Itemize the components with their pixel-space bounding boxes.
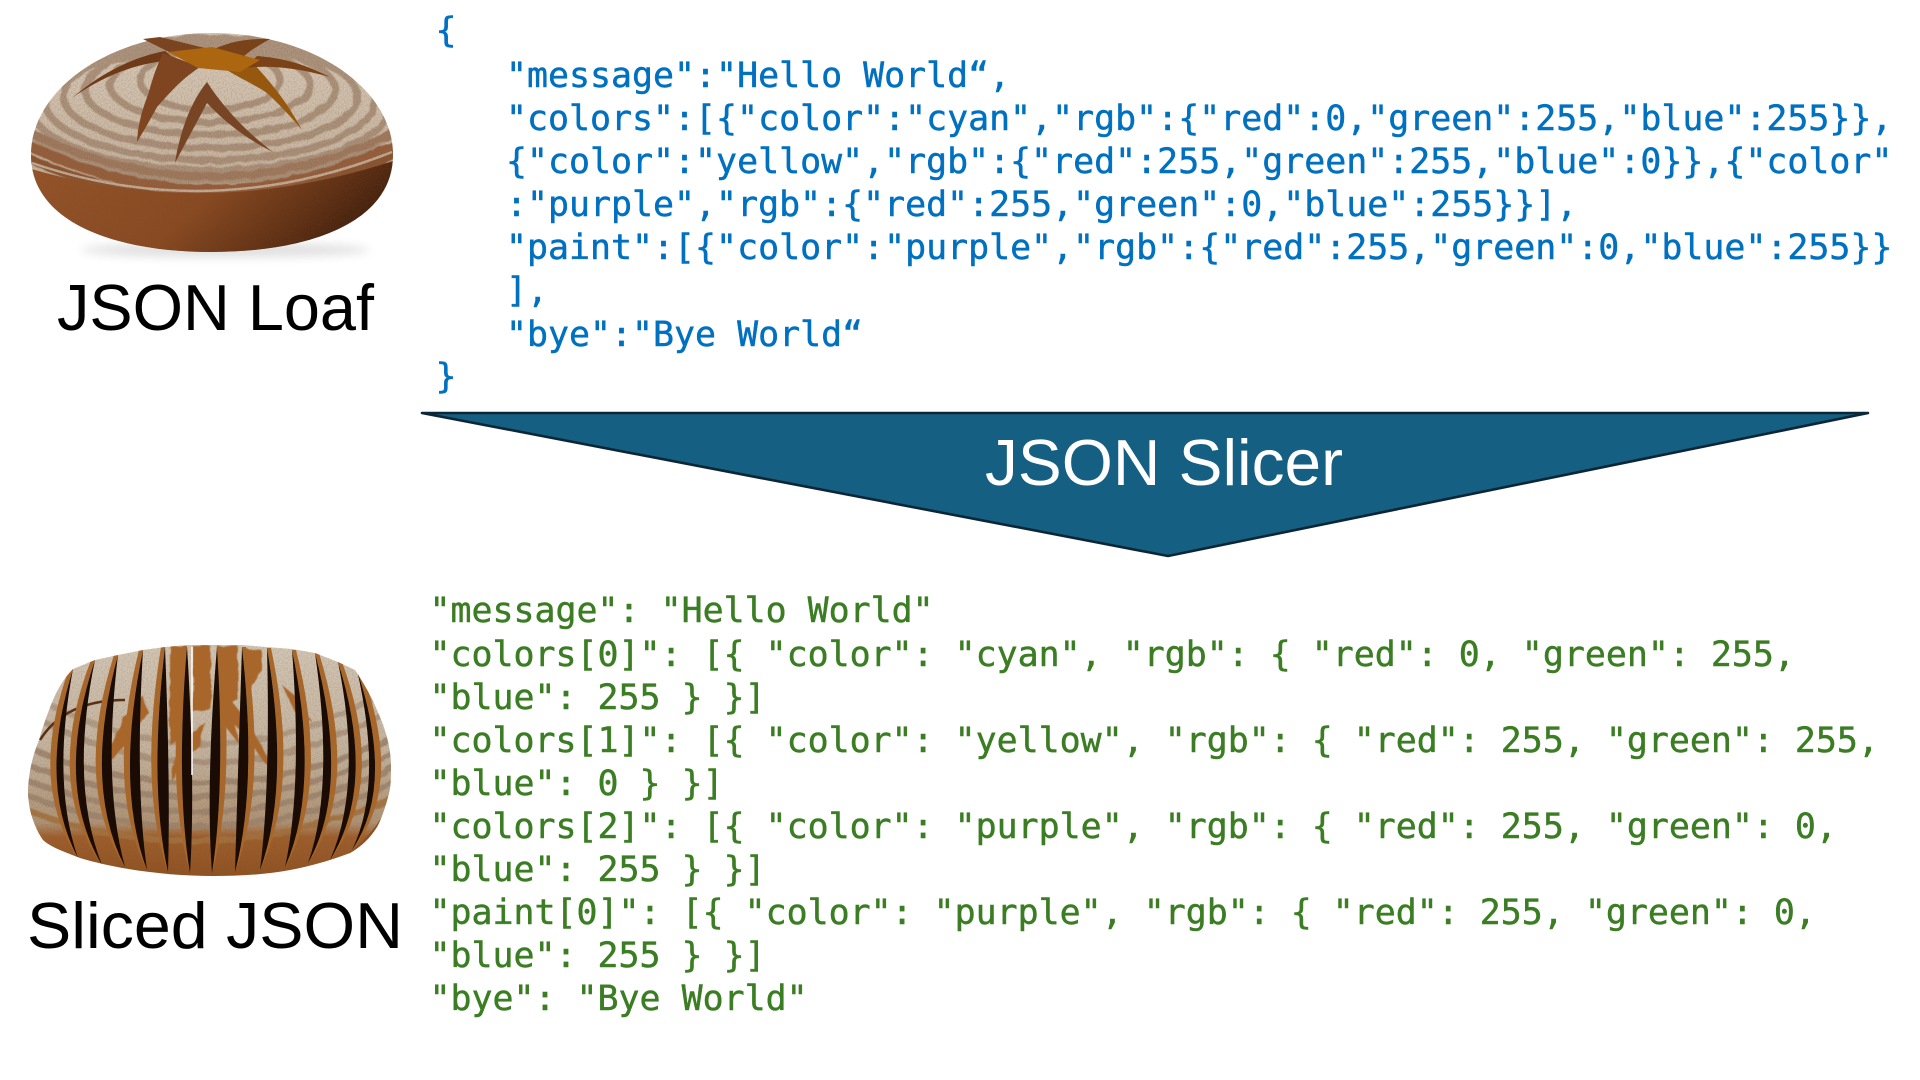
- code block: input JSON: :"purple","rgb":{"red":255,"green":0,"blue":255}}],: [506, 185, 1577, 225]
- code block: sliced output JSON: "bye": "Bye World": [430, 979, 808, 1019]
- code block: input JSON: "message":"Hello World“,: [506, 56, 1010, 96]
- icon: brown central slice tops: [100, 646, 312, 780]
- code block: input JSON: "bye":"Bye World“: [506, 315, 863, 355]
- code block: input JSON: "paint":[{"color":"purple","rgb":{"red":255,"green":0,"blue":255}}: [506, 228, 1892, 268]
- label: JSON Slicer: JSON Slicer: [985, 426, 1343, 499]
- icon: surface cut marks: [40, 700, 125, 740]
- arrow: JSON Slicer funnel: [422, 413, 1868, 556]
- code block: sliced output JSON: "blue": 0 } }]: [430, 764, 724, 804]
- code block: sliced output JSON: "message": "Hello World": [430, 591, 934, 631]
- code block: input JSON: {"color":"yellow","rgb":{"red":255,"green":255,"blue":0}},{"color": [506, 142, 1892, 182]
- code block: sliced output JSON: "blue": 255 } }]: [430, 936, 766, 976]
- code block: sliced output JSON: "paint[0]": [{ "color": "purple", "rgb": { "red": 255, "green": 0,: [430, 893, 1816, 933]
- code block: input JSON: ],: [506, 271, 548, 311]
- icon: bread scoring cuts: [72, 37, 330, 163]
- code block: sliced output JSON: [430, 591, 1879, 1019]
- icon: sliced bread loaf: [20, 640, 400, 880]
- code block: input JSON: "colors":[{"color":"cyan","rgb":{"red":0,"green":255,"blue":255}},: [506, 99, 1892, 139]
- label: Sliced JSON: Sliced JSON: [27, 889, 403, 962]
- icon: gaps between slices: [56, 646, 375, 873]
- code block: sliced output JSON: "blue": 255 } }]: [430, 850, 766, 890]
- icon: whole bread loaf: [18, 28, 404, 262]
- label: JSON Loaf: JSON Loaf: [57, 271, 375, 344]
- code block: sliced output JSON: "blue": 255 } }]: [430, 678, 766, 718]
- code block: input JSON: {: [436, 11, 457, 51]
- icon: slice faces: [50, 646, 381, 873]
- code block: sliced output JSON: "colors[2]": [{ "color": "purple", "rgb": { "red": 255, "green": 0,: [430, 807, 1837, 847]
- code block: sliced output JSON: "colors[1]": [{ "color": "yellow", "rgb": { "red": 255, "green": 255,: [430, 721, 1879, 761]
- code block: input JSON: }: [436, 357, 457, 397]
- code block: input JSON: [436, 11, 1892, 397]
- code block: sliced output JSON: "colors[0]": [{ "color": "cyan", "rgb": { "red": 0, "green": 255,: [430, 635, 1795, 675]
